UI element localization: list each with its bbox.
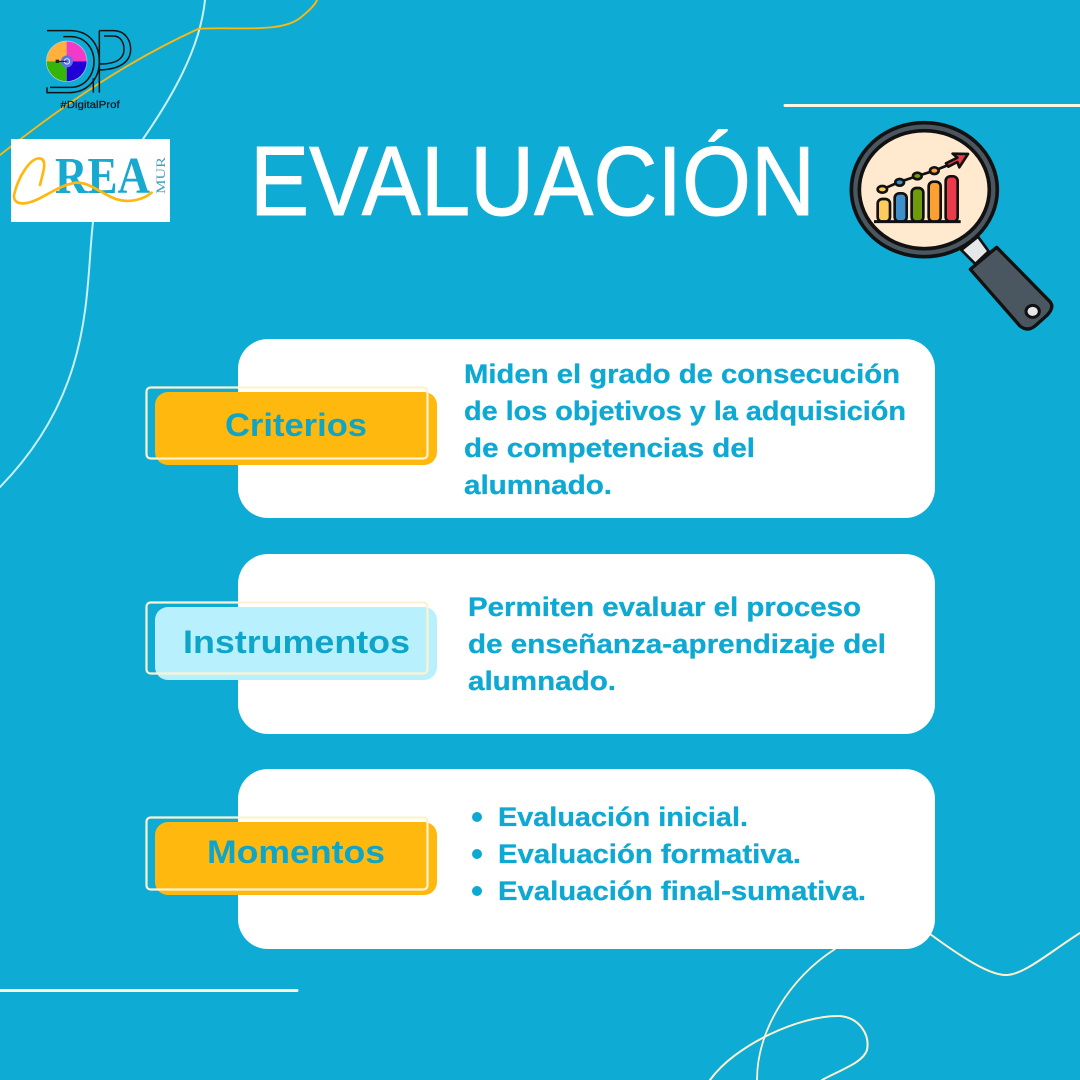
text: Instrumentos description <box>468 592 886 696</box>
label: Momentos <box>146 818 437 895</box>
text: Criterios description <box>464 359 906 500</box>
text: Criterios description: de los objetivos y la adquisición <box>464 396 906 426</box>
logo: CREA MUR <box>11 139 170 222</box>
logo: CREA MUR: REA <box>55 148 150 205</box>
card background <box>238 339 935 518</box>
text: Instrumentos description: alumnado. <box>468 666 616 696</box>
label: Criterios: Criterios <box>225 407 367 443</box>
icon: magnifying glass with growth chart <box>851 123 1052 329</box>
label: Instrumentos: Instrumentos <box>183 624 410 660</box>
logo: DigitalProf <box>46 31 131 111</box>
label: Criterios <box>146 388 437 465</box>
logo: CREA MUR: MUR <box>153 157 168 194</box>
list: Momentos items: Evaluación final-sumativa. <box>498 876 866 906</box>
title: EVALUACIÓN <box>250 126 815 236</box>
text: Criterios description: de competencias del <box>464 433 755 463</box>
text: Instrumentos description: de enseñanza-aprendizaje del <box>468 629 886 659</box>
card background <box>238 769 935 949</box>
panel: Criterios <box>146 339 935 518</box>
panel: Instrumentos <box>146 554 935 734</box>
card background <box>238 554 935 734</box>
text: Criterios description: Miden el grado de consecución <box>464 359 900 389</box>
list: Momentos items: Evaluación inicial. <box>498 802 748 832</box>
panel: Momentos <box>146 769 935 949</box>
text: Instrumentos description: Permiten evaluar el proceso <box>468 592 861 622</box>
label: Momentos: Momentos <box>207 834 385 870</box>
list: Momentos items: Evaluación formativa. <box>498 839 801 869</box>
logo: DigitalProf: #DigitalProf <box>60 100 120 111</box>
list: Momentos items <box>472 802 866 906</box>
label: Instrumentos <box>146 602 437 680</box>
text: Criterios description: alumnado. <box>464 470 612 500</box>
